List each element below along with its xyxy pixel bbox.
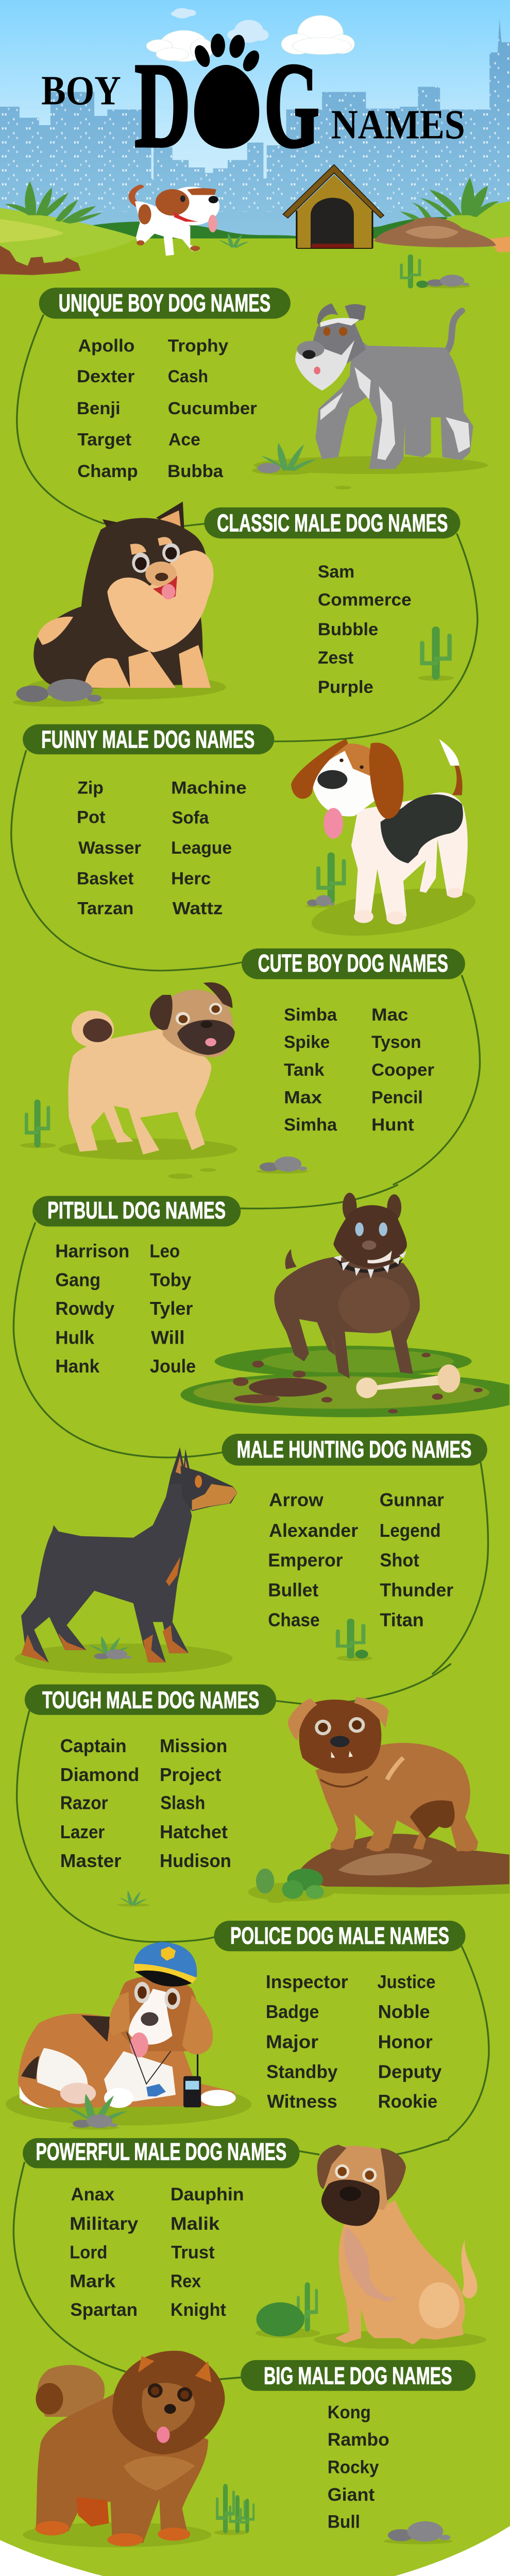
name list: Rocky: [328, 2456, 379, 2477]
name list: Ace: [168, 430, 200, 449]
panel: male hunting dog names: [14, 1434, 488, 1674]
name list: Rookie: [378, 2091, 437, 2112]
panel: police dog male names: [6, 1921, 489, 2138]
name list: Lazer: [60, 1821, 105, 1842]
icon: cactus: [418, 630, 454, 681]
icon: plant and rock: [305, 856, 344, 908]
sky: [0, 0, 510, 239]
connector line: [17, 315, 205, 526]
heading: TOUGH MALE DOG NAMES: [42, 1687, 259, 1714]
panel: header scene: [0, 0, 510, 289]
icon: grass tuft: [219, 233, 249, 248]
connector line: [13, 1185, 398, 1458]
heading: [241, 2360, 475, 2391]
icon: grass and rocks: [67, 2094, 127, 2130]
footer white area: [0, 2526, 510, 2576]
connector line: [11, 751, 242, 971]
illustration: running dog: [132, 187, 219, 256]
panel: tough male dog names: [17, 1664, 509, 1942]
heading: [32, 1196, 241, 1227]
name list: Chase: [268, 1609, 320, 1631]
name list: Cooper: [371, 1060, 434, 1079]
name list: [318, 562, 412, 697]
name list: Hank: [55, 1355, 100, 1377]
name list: Leo: [149, 1240, 180, 1261]
name list: Hulk: [55, 1327, 94, 1348]
name list: Hatchet: [160, 1821, 228, 1842]
name list: Spike: [284, 1032, 330, 1052]
name list: [77, 336, 257, 481]
icon: round cacti: [248, 1869, 334, 1903]
name list: Rex: [171, 2270, 201, 2292]
hills: [91, 217, 510, 239]
name list: Will: [151, 1327, 185, 1348]
name list: Benji: [77, 399, 121, 418]
name list: Mac: [371, 1005, 408, 1025]
connector line: [394, 976, 480, 1184]
panel: pitbull dog names: [13, 1185, 509, 1458]
name list: Max: [284, 1088, 322, 1107]
heading: PITBULL DOG NAMES: [47, 1197, 226, 1224]
name list: Simha: [284, 1115, 337, 1134]
title: BOY DOG NAMES: [41, 33, 465, 173]
name list: Giant: [328, 2484, 375, 2505]
name list: Gang: [55, 1269, 100, 1290]
name list: Slash: [160, 1792, 205, 1814]
name list: Sam: [318, 562, 354, 582]
heading: POWERFUL MALE DOG NAMES: [36, 2138, 286, 2165]
title word: BOY: BOY: [41, 67, 121, 113]
name list: Bubble: [318, 619, 378, 639]
name list: Pencil: [371, 1088, 423, 1107]
icon: rocks: [13, 679, 104, 707]
name list: Bubba: [167, 461, 224, 481]
name list: Master: [60, 1850, 122, 1871]
name list: Honor: [378, 2031, 433, 2052]
name list: Apollo: [78, 336, 134, 355]
name list: Wattz: [173, 899, 223, 918]
name list: Dauphin: [171, 2184, 244, 2205]
name list: Emperor: [268, 1549, 343, 1570]
name list: Deputy: [378, 2061, 442, 2082]
name list: Harrison: [55, 1240, 129, 1261]
name list: Tyler: [150, 1298, 193, 1319]
name list: Herc: [171, 869, 211, 888]
icon: dog house: [283, 165, 384, 248]
name list: Cash: [168, 367, 208, 386]
name list: [328, 2402, 389, 2532]
name list: Champ: [77, 461, 138, 481]
panel: funny male dog names: [11, 724, 479, 971]
name list: Rambo: [328, 2429, 389, 2450]
name list: Lord: [70, 2242, 107, 2263]
name list: Joule: [150, 1355, 196, 1377]
name list: [284, 1005, 434, 1134]
name list: Tank: [284, 1060, 325, 1079]
name list: Alexander: [269, 1520, 358, 1541]
illustration: beagle: [291, 739, 479, 944]
name list: Anax: [71, 2184, 114, 2205]
name list: Diamond: [60, 1764, 139, 1785]
name list: Badge: [266, 2001, 319, 2022]
name list: Trust: [171, 2242, 215, 2263]
icon: cactus: [20, 1103, 56, 1148]
connector line: [13, 2140, 449, 2371]
name list: Witness: [267, 2091, 337, 2112]
connector line: [274, 534, 478, 741]
name list: Spartan: [70, 2299, 138, 2320]
name list: Gunnar: [380, 1489, 444, 1510]
illustration: chow chow: [23, 2351, 225, 2547]
heading: [25, 1684, 276, 1715]
name list: Legend: [380, 1520, 441, 1541]
icon: brown rock right: [374, 217, 496, 247]
illustration: doberman: [14, 1447, 237, 1673]
name list: Project: [160, 1764, 221, 1785]
icon: brown rocks left: [0, 246, 81, 275]
name list: Purple: [318, 677, 373, 697]
clouds: [146, 8, 354, 62]
name list: [60, 1735, 231, 1871]
icon: cactus and rocks: [401, 257, 471, 288]
plants left and right: [5, 178, 499, 224]
connector line: [218, 2378, 241, 2379]
icon: cactus: [336, 1621, 372, 1661]
name list: Inspector: [266, 1971, 348, 1992]
name list: Kong: [328, 2402, 371, 2422]
name list: Razor: [60, 1792, 108, 1814]
illustration: pitbull: [275, 1193, 420, 1379]
connector line: [449, 1946, 489, 2138]
panel: big male dog names: [0, 2351, 510, 2576]
illustration: schnauzer: [253, 303, 488, 489]
icon: rocks: [383, 2521, 452, 2544]
connector line: [17, 1664, 450, 1942]
name list: Standby: [266, 2061, 338, 2082]
name list: Malik: [171, 2213, 219, 2234]
heading: [23, 2138, 299, 2168]
title: BOY DOG NAMES: D: [134, 38, 191, 173]
illustration: pomeranian: [28, 501, 226, 700]
heading: FUNNY MALE DOG NAMES: [41, 725, 254, 753]
name list: Noble: [378, 2001, 430, 2022]
name list: Mission: [160, 1735, 227, 1756]
name list: Zip: [77, 778, 104, 798]
name list: Machine: [171, 778, 247, 798]
name list: Bull: [328, 2512, 360, 2532]
icon: round cactus: [256, 2285, 320, 2338]
name list: Zest: [318, 648, 353, 668]
illustration: mastiff: [314, 2145, 486, 2349]
name list: Dexter: [77, 367, 135, 386]
name list: Pot: [77, 807, 106, 827]
illustration: police beagle: [6, 1976, 251, 2126]
illustration: ground with hole and bone: [180, 1346, 509, 1417]
icon: grass and rocks: [89, 1636, 133, 1661]
name list: Trophy: [168, 336, 228, 355]
name list: Wasser: [78, 838, 141, 858]
name list: Basket: [77, 869, 134, 888]
illustration: bulldog: [288, 1697, 478, 1852]
name list: Military: [70, 2213, 139, 2234]
name list: [77, 778, 247, 918]
name list: Sofa: [172, 808, 209, 827]
name list: Major: [266, 2031, 318, 2052]
name list: [266, 1971, 442, 2112]
icon: small grass: [117, 1890, 149, 1907]
name list: Tyson: [371, 1032, 421, 1052]
connector line: [433, 1463, 488, 1674]
paw shaped O: [192, 33, 262, 149]
name list: Hunt: [371, 1115, 414, 1134]
name list: Toby: [150, 1269, 192, 1290]
icon: cactus cluster: [214, 2487, 253, 2535]
name list: Thunder: [380, 1579, 453, 1600]
city skyline: [0, 19, 510, 239]
name list: Justice: [377, 1971, 435, 1992]
icon: rocks: [168, 1157, 309, 1179]
name list: Arrow: [269, 1489, 324, 1510]
name list: Captain: [60, 1735, 127, 1756]
heading: [39, 287, 291, 319]
icon: police hat: [133, 1942, 197, 1987]
panel: unique boy dog names: [17, 287, 488, 526]
name list: Bullet: [268, 1579, 318, 1600]
name list: Target: [77, 430, 131, 449]
heading: UNIQUE BOY DOG NAMES: [59, 289, 270, 317]
name list: Mark: [70, 2270, 115, 2292]
name list: Rowdy: [55, 1298, 115, 1319]
name list: Simba: [284, 1005, 337, 1025]
panel: powerful male dog names: [13, 2138, 486, 2371]
panel: cute boy dog names: [20, 948, 480, 1184]
title: BOY DOG NAMES: G: [264, 38, 319, 173]
name list: Titan: [380, 1609, 424, 1631]
name list: Shot: [380, 1549, 419, 1570]
heading: [23, 724, 274, 754]
icon: grass and rock: [252, 443, 317, 475]
name list: Hudison: [160, 1850, 231, 1871]
illustration: brown rock: [260, 1834, 509, 1895]
name list: [268, 1489, 453, 1631]
name list: Tarzan: [77, 899, 133, 918]
name list: [70, 2184, 244, 2320]
panel: classic male dog names: [13, 501, 478, 741]
name list: Commerce: [318, 590, 412, 609]
name list: League: [171, 838, 232, 858]
name list: Cucumber: [168, 399, 257, 418]
name list: [55, 1240, 196, 1377]
illustration: pug: [59, 982, 237, 1160]
name list: Knight: [171, 2299, 226, 2320]
